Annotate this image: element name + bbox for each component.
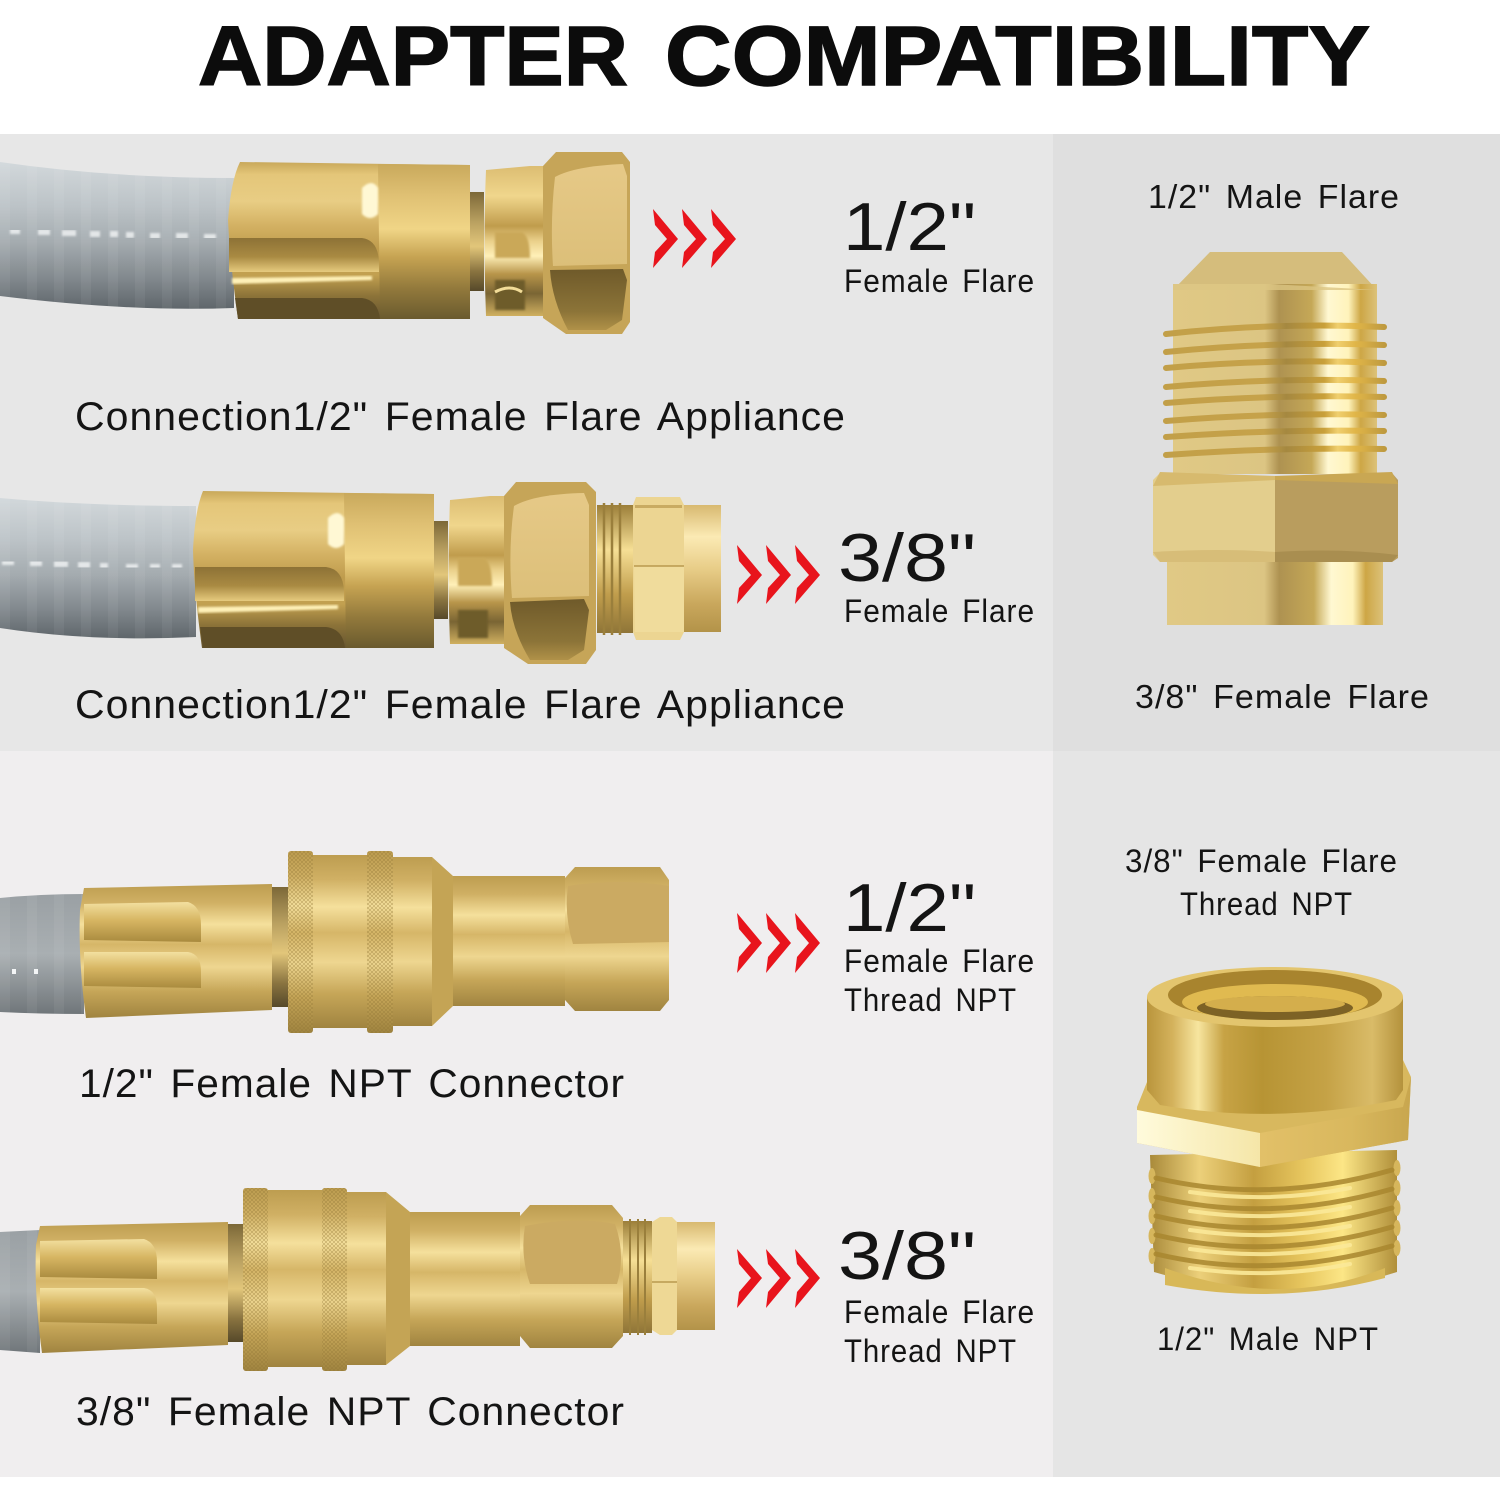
size label: 1/2 female flare thread NPT: Thread NPT	[844, 982, 1017, 1018]
title: COMPATIBILITY	[665, 9, 1370, 103]
adapter: 1/2 male flare to 3/8 female flare	[1153, 252, 1398, 625]
size label: 3/8 female flare thread NPT: Thread NPT	[844, 1333, 1017, 1369]
panel: male flare adapter background	[1053, 134, 1500, 751]
size label: 1/2 female flare: Female Flare	[844, 263, 1035, 299]
title	[198, 9, 1370, 103]
size label: 3/8 female flare thread NPT: Female Flare	[844, 1294, 1035, 1330]
size label: 1/2 female flare thread NPT: Female Flare	[844, 943, 1035, 979]
caption: 1/2 female NPT connector: 1/2" Female NPT Connector	[79, 1062, 625, 1106]
panel: NPT adapter background	[1053, 751, 1500, 1477]
icon: red chevron arrows	[737, 545, 820, 604]
connector: 1/2 inch female flare hose	[0, 152, 630, 334]
size label: 1/2 female flare: 1/2"	[843, 189, 976, 265]
adapter: 1/2 male NPT to 3/8 female flare thread	[1137, 967, 1411, 1294]
size label: 3/8 female flare: Female Flare	[844, 593, 1035, 629]
connector: 1/2 inch female NPT hose	[0, 851, 669, 1033]
size label: 1/2 female flare thread NPT	[843, 870, 1035, 1018]
size label: 1/2 female flare thread NPT: 1/2"	[843, 870, 976, 946]
caption: connection appliance second: Connection1/2" Female Flare Appliance	[75, 683, 846, 727]
label: 3/8 female flare thread NPT	[1125, 843, 1398, 922]
size label: 3/8 female flare: 3/8"	[838, 520, 976, 596]
label: 1/2 male flare: 1/2" Male Flare	[1148, 178, 1400, 215]
label: 3/8 female flare thread NPT: Thread NPT	[1180, 886, 1353, 922]
size label: 3/8 female flare	[838, 520, 1035, 629]
icon: red chevron arrows	[653, 209, 736, 268]
size label: 3/8 female flare thread NPT: 3/8"	[838, 1218, 976, 1294]
size label: 3/8 female flare thread NPT	[838, 1218, 1035, 1369]
caption: 3/8 female NPT connector: 3/8" Female NPT Connector	[76, 1390, 625, 1434]
title: ADAPTER	[198, 9, 628, 103]
panel: flare hoses background	[0, 134, 1053, 751]
size label: 1/2 female flare	[843, 189, 1035, 299]
connector: 3/8 inch female NPT hose	[0, 1188, 715, 1371]
icon: red chevron arrows	[737, 1249, 820, 1308]
label: 3/8 female flare thread NPT: 3/8" Female Flare	[1125, 843, 1398, 879]
label: 3/8 female flare: 3/8" Female Flare	[1135, 678, 1430, 715]
icon: red chevron arrows	[737, 913, 820, 973]
panel: NPT hoses background	[0, 751, 1053, 1477]
caption: connection appliance first: Connection1/2" Female Flare Appliance	[75, 395, 846, 439]
connector: 3/8 inch female flare hose	[0, 482, 721, 664]
label: 1/2 male NPT: 1/2" Male NPT	[1157, 1321, 1379, 1357]
